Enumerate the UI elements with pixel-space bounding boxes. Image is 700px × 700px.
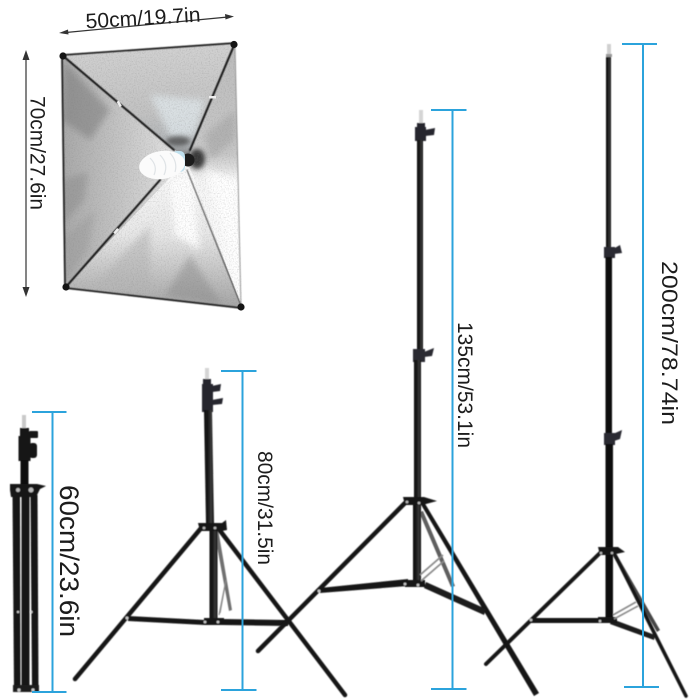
pin [419, 110, 423, 123]
pin [607, 44, 611, 55]
shaft [20, 460, 28, 485]
shaft top [606, 57, 611, 252]
mid clamp [413, 348, 434, 362]
bulb [137, 148, 194, 182]
measure: 200cm [622, 44, 659, 687]
rear leg [613, 555, 660, 632]
softbox panel: right [190, 48, 238, 298]
dimension arrow: softbox width [59, 14, 234, 34]
left leg [486, 553, 600, 664]
clamp upper [604, 245, 622, 258]
softbox rib clips [113, 96, 216, 234]
left leg [75, 527, 202, 679]
rear leg [214, 529, 232, 611]
softbox hub shadow [166, 136, 205, 169]
label: 60cm: 60cm/23.6in [54, 485, 84, 637]
right leg [420, 502, 539, 696]
label: 80cm: 80cm/31.5in [253, 451, 276, 565]
pin [205, 368, 209, 380]
softbox corners [59, 41, 245, 311]
softbox panel: left [62, 58, 176, 284]
rear leg [419, 511, 455, 587]
feet [13, 685, 39, 692]
label: softbox width: 50cm/19.7in [85, 4, 201, 33]
measure: 60cm [32, 412, 66, 692]
right leg [614, 553, 686, 696]
left leg [258, 503, 405, 651]
clamps [202, 379, 223, 412]
shaft [204, 410, 214, 525]
right leg [218, 528, 345, 695]
hub [403, 497, 437, 505]
softbox frame [62, 43, 241, 308]
shaft lower [414, 360, 421, 500]
shaft upper [417, 140, 423, 355]
braces [320, 579, 408, 593]
stand: folded 60cm [10, 415, 46, 692]
softbox shading folds [62, 62, 240, 305]
softbox [55, 40, 250, 315]
measure: 135cm [431, 110, 466, 689]
stand: 80cm [75, 368, 345, 695]
braces [128, 616, 205, 625]
hub [198, 520, 227, 531]
strut [420, 555, 444, 581]
top clamp [415, 123, 435, 141]
shaft middle [606, 257, 612, 437]
label: softbox height: 70cm/27.6in [26, 96, 48, 210]
strut [613, 602, 638, 619]
stand: 200cm [486, 44, 686, 696]
softbox panel: bottom [68, 184, 240, 308]
softbox panel: top [62, 43, 235, 160]
collar [10, 484, 46, 497]
braces [531, 618, 603, 623]
measure: 80cm [221, 371, 256, 690]
stand: 135cm [258, 110, 539, 696]
clamp lower [604, 430, 622, 445]
softbox ribs [62, 43, 242, 308]
clamp block [18, 428, 38, 461]
strut [219, 580, 226, 615]
softbox fabric speckle [65, 45, 242, 306]
label: 135cm: 135cm/53.1in [453, 322, 476, 448]
hub [598, 547, 625, 555]
dimension arrow: softbox height [22, 50, 30, 297]
pin [22, 415, 26, 428]
shaft lower [606, 444, 613, 620]
legs [12, 495, 38, 691]
label: 200cm: 200cm/78.74in [657, 261, 682, 425]
